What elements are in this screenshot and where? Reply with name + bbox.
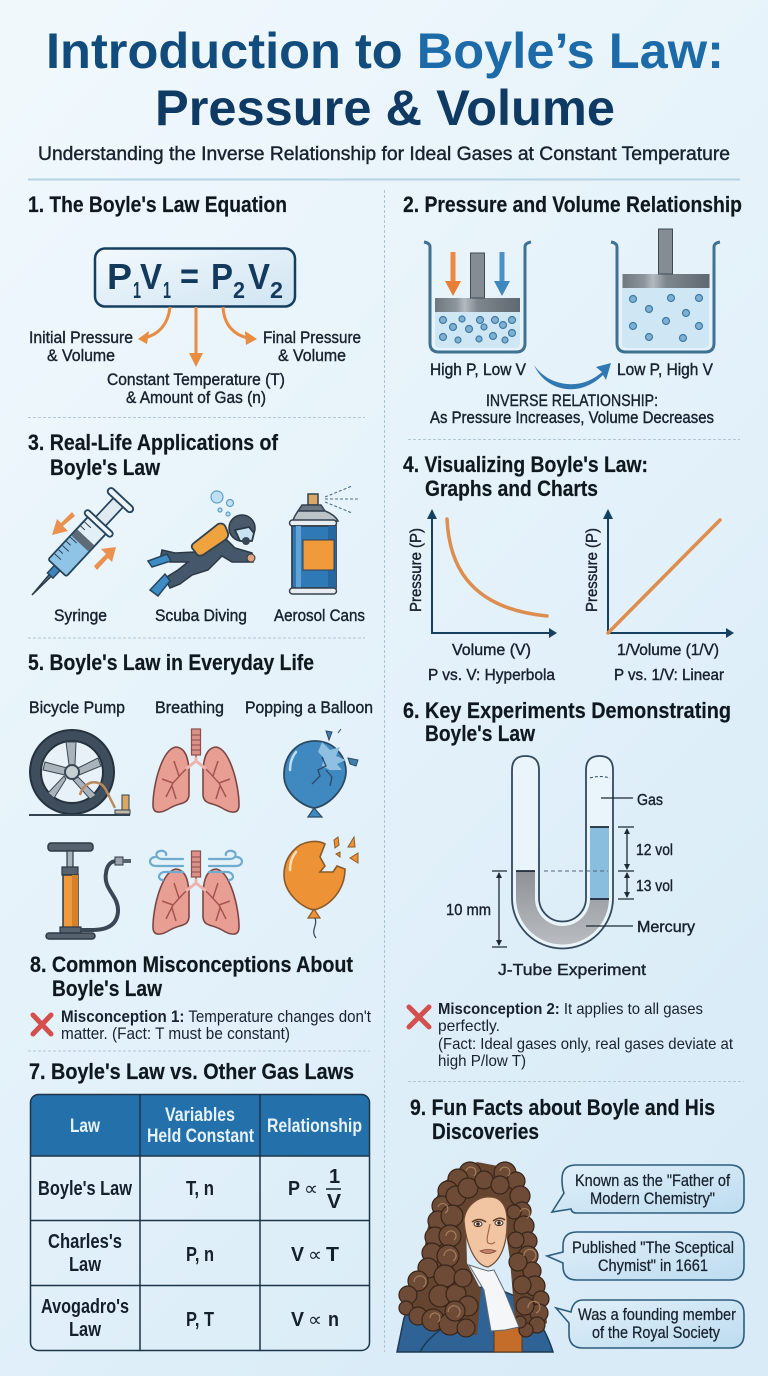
inverse relationship note: As Pressure Increases, Volume Decreases bbox=[430, 408, 714, 427]
heading 8 bbox=[30, 952, 354, 1001]
diagram: J-tube: 13 vol bbox=[636, 878, 673, 895]
row: Avogadro's Law: P, T bbox=[186, 1309, 214, 1331]
panel: 2 pressure and volume bbox=[403, 192, 742, 427]
heading 5: 5. Boyle's Law in Everyday Life bbox=[28, 650, 314, 675]
row: Charles's Law: Charles's bbox=[48, 1231, 122, 1253]
icon: syringe bbox=[19, 485, 136, 607]
speech bubble 3: of the Royal Society bbox=[592, 1324, 721, 1342]
row: Avogadro's Law: Law bbox=[69, 1319, 101, 1341]
heading 4: Graphs and Charts bbox=[425, 476, 598, 501]
equation box: 1 bbox=[133, 277, 141, 303]
table header: Held Constant bbox=[147, 1126, 255, 1147]
experiment caption: J-Tube Experiment bbox=[498, 962, 647, 979]
icon: lungs with airflow bbox=[150, 851, 242, 934]
panel: 4 graphs bbox=[403, 452, 734, 684]
heading 8: 8. Common Misconceptions About bbox=[30, 952, 354, 977]
table header: Variables bbox=[165, 1105, 235, 1126]
heading 4 bbox=[403, 452, 648, 501]
equation box: V bbox=[248, 256, 270, 297]
row: Charles's Law: T bbox=[326, 1244, 339, 1266]
portrait of Robert Boyle bbox=[397, 1162, 553, 1352]
heading 7: 7. Boyle's Law vs. Other Gas Laws bbox=[29, 1059, 354, 1084]
chart: hyperbola: Volume (V) bbox=[452, 642, 531, 659]
icon: popped orange balloon bbox=[284, 837, 358, 938]
row: Boyle's Law: Boyle's Law bbox=[38, 1178, 132, 1200]
heading 1: 1. The Boyle's Law Equation bbox=[28, 192, 287, 217]
panel: 1 equation bbox=[28, 192, 361, 407]
title: Introduction to Boyle’s Law: bbox=[46, 23, 724, 79]
application labels: Syringe bbox=[54, 606, 107, 625]
speech bubble 3: Was a founding member bbox=[578, 1306, 736, 1324]
misconception 2 text: high P/low T) bbox=[438, 1053, 526, 1070]
right cylinder: low pressure bbox=[611, 229, 720, 352]
diagram: J-tube: 10 mm bbox=[446, 902, 491, 919]
equation box: V bbox=[140, 256, 162, 297]
row: Charles's Law: ∝ bbox=[308, 1245, 322, 1266]
diagram: J-tube: Gas bbox=[637, 792, 663, 809]
heading 6 bbox=[403, 698, 731, 746]
misconception 2 text: Misconception 2: It applies to all gases bbox=[438, 1001, 703, 1018]
panel: misconception 2 bbox=[409, 1001, 734, 1070]
icon: aerosol can bbox=[290, 486, 358, 594]
heading 6: Boyle's Law bbox=[425, 721, 536, 746]
left cylinder: high pressure bbox=[424, 242, 531, 352]
icon: wheel bbox=[29, 730, 130, 815]
misconception 2 text: perfectly. bbox=[438, 1018, 500, 1035]
heading 6: 6. Key Experiments Demonstrating bbox=[403, 698, 731, 723]
speech bubble 2 bbox=[547, 1232, 744, 1280]
table header: Relationship bbox=[267, 1116, 362, 1137]
icon: scuba diver bbox=[148, 491, 255, 596]
everyday labels bbox=[29, 698, 373, 717]
row: Avogadro's Law: Avogadro's bbox=[41, 1296, 129, 1318]
chart: hyperbola bbox=[408, 509, 557, 684]
row: Boyle's Law: T, n bbox=[186, 1178, 214, 1200]
panel: 8 misconceptions bbox=[30, 952, 371, 1043]
row: Boyle's Law: ∝ bbox=[304, 1179, 318, 1200]
equation labels: Initial Pressure bbox=[29, 328, 133, 347]
row: Avogadro's Law: V bbox=[291, 1309, 305, 1331]
application labels: Aerosol Cans bbox=[274, 606, 365, 625]
row: Boyle's Law bbox=[38, 1166, 342, 1213]
speech bubble 3 bbox=[556, 1300, 744, 1348]
application labels: Scuba Diving bbox=[155, 606, 247, 625]
arrows from equation bbox=[138, 307, 257, 367]
heading 3: Boyle's Law bbox=[50, 455, 161, 480]
icon: lungs bbox=[153, 729, 239, 812]
misconception 1 text bbox=[61, 1008, 371, 1043]
chart: linear: Pressure (P) bbox=[584, 528, 601, 612]
panel: 7 gas laws table bbox=[29, 1059, 370, 1351]
speech bubble 1 bbox=[552, 1165, 744, 1213]
chart: linear bbox=[584, 509, 734, 684]
everyday labels: Popping a Balloon bbox=[245, 698, 373, 717]
heading 3 bbox=[28, 430, 279, 480]
panel: 9 fun facts bbox=[397, 1095, 744, 1352]
equation box: 2 bbox=[270, 277, 283, 303]
cylinder labels: High P, Low V bbox=[430, 360, 527, 379]
panel: 6 key experiments bbox=[403, 698, 731, 979]
row: Avogadro's Law: n bbox=[328, 1309, 339, 1331]
row: Charles's Law bbox=[48, 1231, 339, 1276]
equation labels: Final Pressure bbox=[263, 328, 361, 347]
panel: 5 everyday life bbox=[28, 650, 373, 939]
row: Charles's Law: V bbox=[291, 1244, 305, 1266]
table header bbox=[70, 1105, 362, 1147]
misconception 1 text: matter. (Fact: T must be constant) bbox=[61, 1025, 290, 1043]
heading 8: Boyle's Law bbox=[52, 976, 163, 1001]
icon: bicycle pump bbox=[46, 843, 131, 939]
heading 9 bbox=[410, 1095, 715, 1144]
equation box: = bbox=[180, 255, 199, 296]
equation labels: Constant Temperature (T) bbox=[107, 370, 285, 389]
subtitle: Understanding the Inverse Relationship for Ideal Gases at Constant Temperature bbox=[38, 144, 730, 165]
diagram: J-tube bbox=[446, 756, 695, 949]
equation labels: & Volume bbox=[47, 346, 115, 365]
inverse relationship note: INVERSE RELATIONSHIP: bbox=[486, 391, 658, 410]
icon: red cross bbox=[33, 1015, 51, 1034]
row: Charles's Law: Law bbox=[69, 1254, 101, 1276]
equation box bbox=[95, 248, 295, 306]
everyday labels: Breathing bbox=[155, 698, 224, 717]
diagram: J-tube: Mercury bbox=[637, 919, 695, 936]
row: Charles's Law: P, n bbox=[186, 1244, 214, 1266]
speech bubble 2: Chymist" in 1661 bbox=[598, 1257, 708, 1275]
curved arrow bbox=[534, 363, 611, 389]
speech bubble 1: Modern Chemistry" bbox=[590, 1190, 715, 1208]
row: Boyle's Law: 1 bbox=[329, 1166, 340, 1188]
panel: 3 real-life applications bbox=[19, 430, 365, 625]
heading 4: 4. Visualizing Boyle's Law: bbox=[403, 452, 648, 477]
chart: hyperbola: P vs. V: Hyperbola bbox=[428, 667, 555, 684]
cylinder labels bbox=[430, 360, 714, 379]
misconception 2 text bbox=[438, 1001, 734, 1070]
equation box: P bbox=[211, 256, 233, 297]
inverse relationship note bbox=[430, 391, 714, 427]
row: Avogadro's Law bbox=[41, 1296, 339, 1341]
row: Boyle's Law: P bbox=[288, 1178, 300, 1200]
table bbox=[30, 1094, 370, 1351]
equation labels bbox=[29, 328, 361, 407]
equation box: 2 bbox=[233, 277, 245, 303]
equation box: P bbox=[107, 256, 132, 297]
table header: Law bbox=[70, 1116, 100, 1137]
icon: red cross bbox=[409, 1007, 429, 1027]
heading 9: 9. Fun Facts about Boyle and His bbox=[410, 1095, 715, 1120]
speech bubble 2: Published "The Sceptical bbox=[572, 1239, 734, 1257]
speech bubble 1: Known as the "Father of bbox=[575, 1172, 730, 1190]
chart: linear: P vs. 1/V: Linear bbox=[614, 667, 725, 684]
heading 9: Discoveries bbox=[432, 1119, 539, 1144]
chart: hyperbola: Pressure (P) bbox=[408, 528, 425, 612]
cylinder labels: Low P, High V bbox=[617, 360, 714, 379]
diagram: J-tube: 12 vol bbox=[636, 842, 673, 859]
row: Boyle's Law: V bbox=[327, 1191, 342, 1213]
equation labels: & Amount of Gas (n) bbox=[126, 388, 266, 407]
title bbox=[46, 23, 724, 136]
icon: popped blue balloon bbox=[284, 729, 358, 817]
equation box: 1 bbox=[163, 277, 171, 303]
application labels bbox=[54, 606, 365, 625]
everyday labels: Bicycle Pump bbox=[29, 698, 125, 717]
row: Avogadro's Law: ∝ bbox=[308, 1310, 322, 1331]
title: Pressure & Volume bbox=[155, 80, 615, 136]
chart: linear: 1/Volume (1/V) bbox=[617, 642, 719, 659]
misconception 1 text: Misconception 1: Temperature changes don't bbox=[61, 1008, 371, 1026]
misconception 2 text: (Fact: Ideal gases only, real gases deviate at bbox=[438, 1036, 734, 1053]
heading 3: 3. Real-Life Applications of bbox=[28, 430, 279, 455]
equation labels: & Volume bbox=[278, 346, 346, 365]
